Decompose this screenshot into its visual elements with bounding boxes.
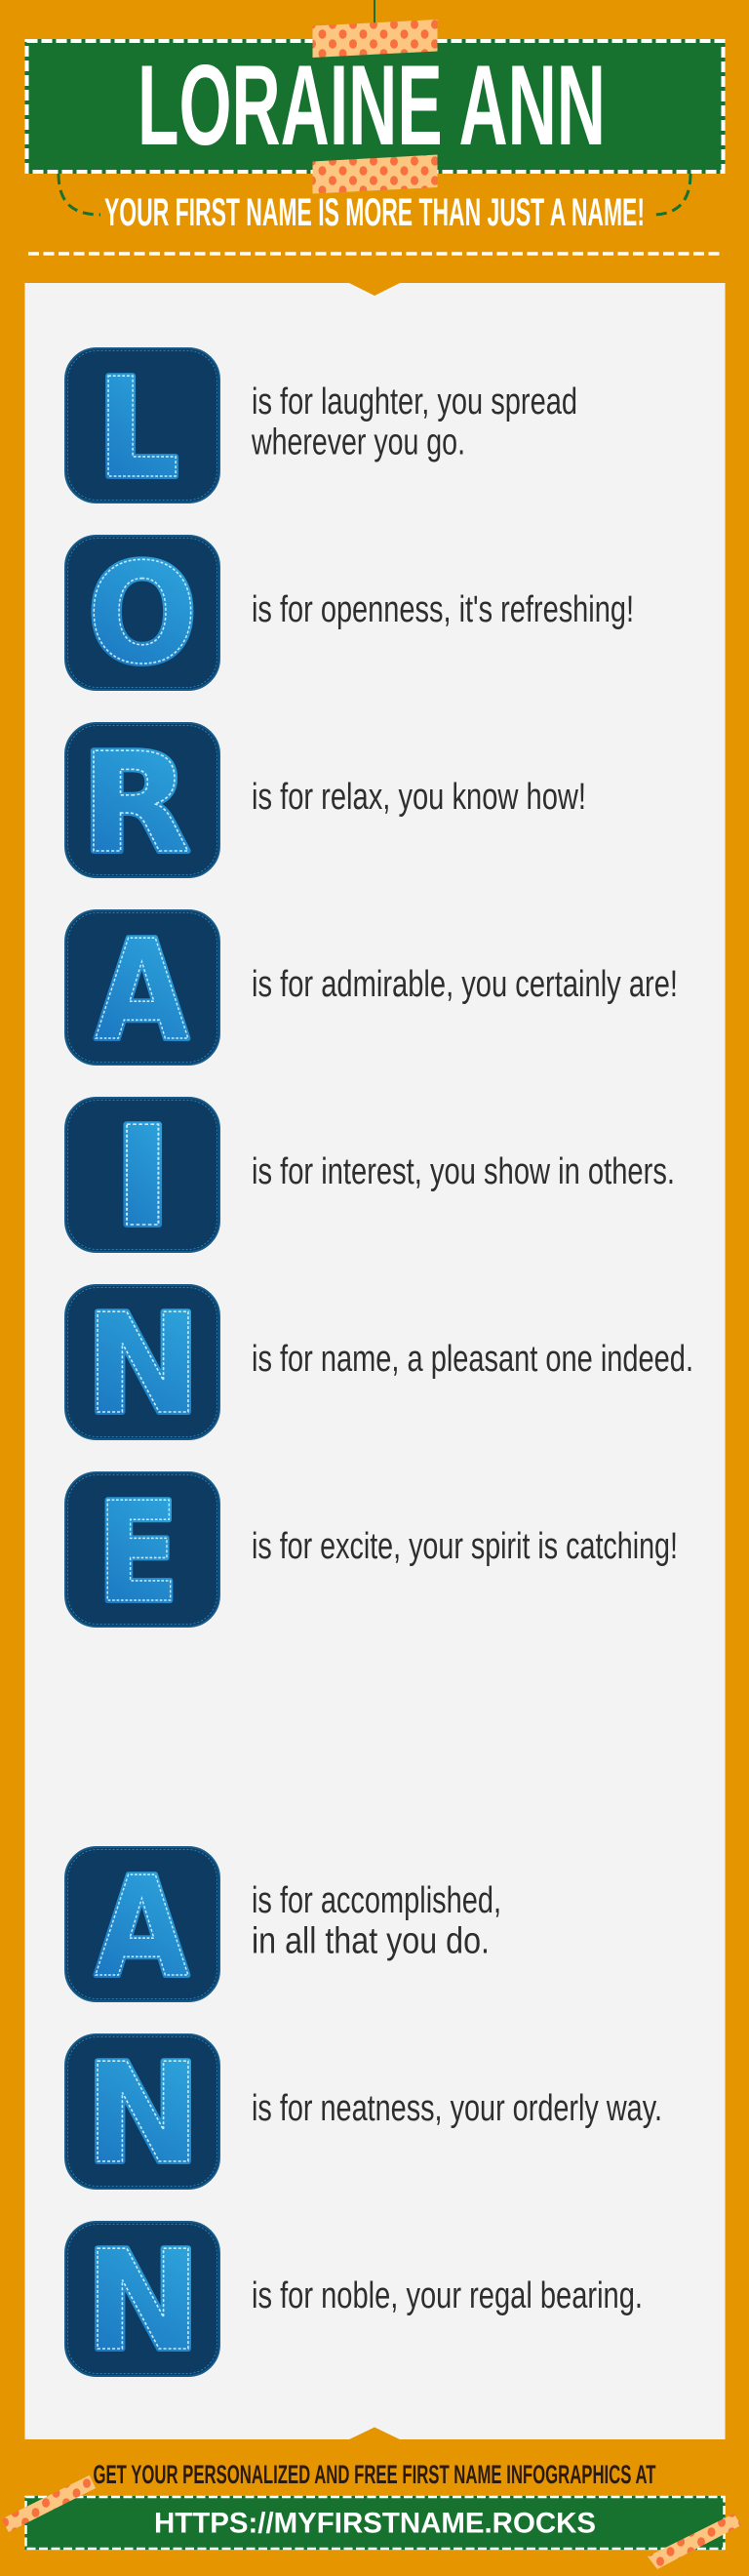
icon: letter N: N [85,1285,201,1445]
icon: letter A: A [95,1848,188,2008]
icon: letter I: I [111,1098,174,1258]
bottom tape [312,154,437,193]
panel: letters [25,282,726,2440]
icon: letter O: O [88,535,197,695]
icon: letter N: N [85,2222,201,2382]
row: I [65,1098,675,1258]
icon: letter L [65,348,219,509]
text: A second: in all that you do. [252,1920,490,1961]
text: A second: is for accomplished, [252,1880,501,1921]
icon: letter A: A [95,911,188,1071]
left connector [59,174,100,215]
text: R: is for relax, you know how! [252,777,586,818]
row: R [65,723,586,884]
icon: letter R: R [80,724,191,884]
icon: letter A: A [95,911,188,1071]
icon: letter A [65,910,219,1071]
text: L: wherever you go. [251,422,465,463]
row: N [65,1285,693,1445]
text: O: is for openness, it's refreshing! [252,589,634,630]
hanging line [374,0,375,23]
text: L: is for laughter, you spread [252,382,577,423]
icon: letter A: A [95,1848,188,2008]
right connector [652,174,690,215]
text: A second [252,1880,501,1961]
icon: letter A [65,1847,219,2008]
footer banner [25,2496,726,2550]
icon: letter N: N [85,2222,201,2382]
row: A [65,910,678,1071]
text: N third: is for noble, your regal bearing. [252,2275,643,2316]
row: N third [65,2222,643,2382]
icon: letter L: L [97,349,179,509]
row: L [65,348,577,509]
row: E [65,1472,678,1633]
icon: letter E [65,1472,219,1633]
footer url: HTTPS://MYFIRSTNAME.ROCKS [154,2508,596,2539]
icon: letter E: E [97,1473,179,1633]
icon: letter N: N [85,1285,201,1445]
text: L [251,382,577,463]
icon: letter R [65,723,219,884]
title banner [25,39,726,174]
icon: letter I [65,1098,219,1258]
icon: letter N: N [85,2034,201,2194]
icon: letter O: O [88,535,197,695]
footer tape right [648,2514,741,2569]
icon: letter E: E [97,1473,179,1633]
icon: letter R: R [80,724,191,884]
top tape [312,20,437,58]
icon: letter I: I [111,1098,174,1258]
icon: letter L: L [97,349,179,509]
row: N second [65,2034,662,2194]
dashed divider [28,252,721,256]
row: O [65,535,634,695]
row: A second [65,1847,501,2008]
footer tape left [2,2475,96,2532]
icon: letter N: N [85,2034,201,2194]
